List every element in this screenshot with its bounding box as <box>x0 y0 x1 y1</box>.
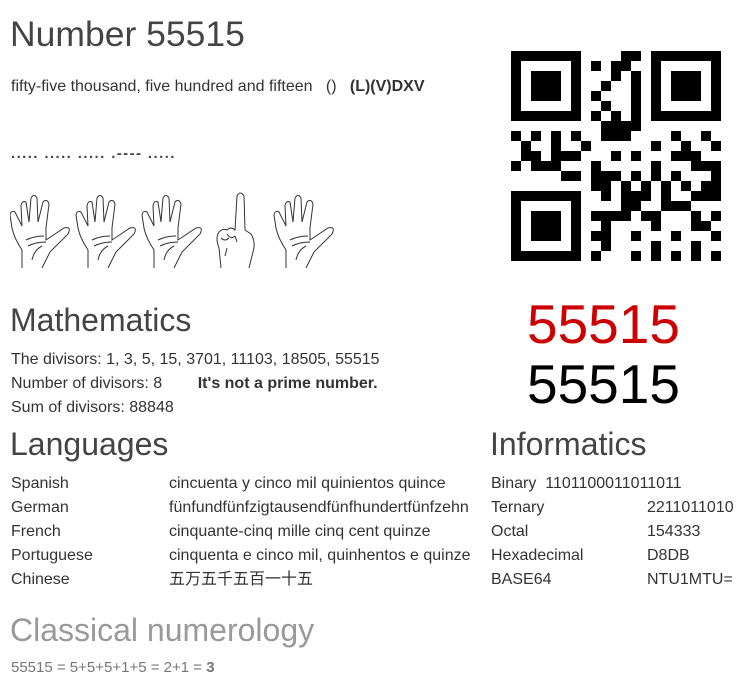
languages table: Chinese <box>11 571 70 588</box>
languages table: Portuguese <box>11 547 93 564</box>
informatics table: BASE64 <box>491 571 551 588</box>
informatics table: 2211011010 <box>647 499 734 516</box>
numerology result: 55515 = 5+5+5+1+5 = 2+1 = 3 <box>11 659 215 676</box>
text: morse code: ..... ..... ..... .---- ..... <box>11 145 176 162</box>
informatics table: Binary 1101100011011011 <box>491 475 682 492</box>
math facts: The divisors: 1, 3, 5, 15, 3701, 11103, 18505, 55515 <box>11 351 380 368</box>
text: number in words: fifty-five thousand, five hundred and fifteen () (L)(V)DXV <box>11 78 425 95</box>
heading: Languages: Languages <box>10 426 168 462</box>
informatics table: Ternary <box>491 499 544 516</box>
languages table: fünfundfünfzigtausendfünfhundertfünfzehn <box>169 499 469 516</box>
heading: Classical numerology: Classical numerology <box>10 612 314 648</box>
big number black: 55515 <box>527 353 680 415</box>
informatics table: 154333 <box>647 523 700 540</box>
languages table: cincuenta y cinco mil quinientos quince <box>169 475 446 492</box>
informatics table: Octal <box>491 523 528 540</box>
informatics table: D8DB <box>647 547 690 564</box>
title: Number 55515 <box>10 14 245 54</box>
math facts: Number of divisors: 8 It's not a prime number. <box>11 375 378 392</box>
languages table: cinquenta e cinco mil, quinhentos e quinze <box>169 547 471 564</box>
math facts <box>11 351 380 416</box>
icon: hands sign language <box>10 192 334 268</box>
informatics table: NTU1MTU= <box>647 571 733 588</box>
informatics table <box>491 475 734 588</box>
informatics table: Hexadecimal <box>491 547 583 564</box>
languages table: 五万五千五百一十五 <box>169 571 313 588</box>
languages table: French <box>11 523 61 540</box>
languages table: German <box>11 499 69 516</box>
heading: Informatics: Informatics <box>490 426 646 462</box>
languages table: cinquante-cinq mille cinq cent quinze <box>169 523 430 540</box>
math facts: Sum of divisors: 88848 <box>11 399 174 416</box>
QR code <box>511 51 721 261</box>
languages table <box>11 475 471 588</box>
big number red: 55515 <box>527 293 680 355</box>
languages table: Spanish <box>11 475 69 492</box>
heading: Mathematics: Mathematics <box>10 302 191 338</box>
